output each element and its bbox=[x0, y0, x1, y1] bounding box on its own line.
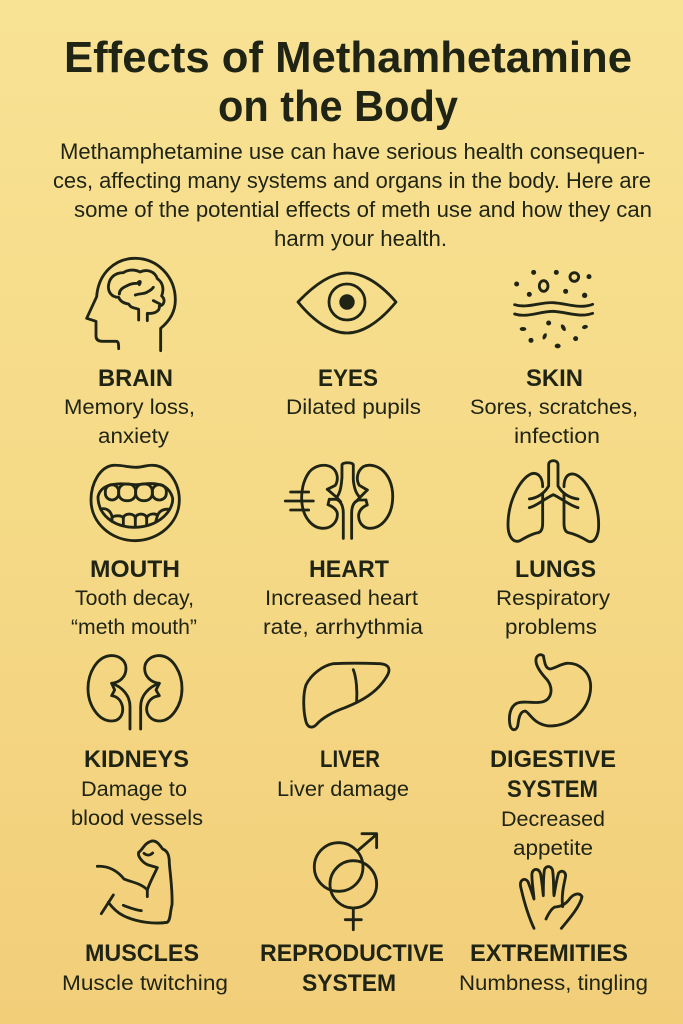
intro paragraph bbox=[53, 139, 652, 251]
heading: LUNGS bbox=[515, 556, 596, 583]
description: Dilated pupils bbox=[286, 395, 421, 419]
title: Effects of Methamhetamine bbox=[64, 33, 632, 82]
description: problems bbox=[505, 615, 597, 639]
heading: MUSCLES bbox=[85, 940, 199, 967]
panel: kidneys bbox=[71, 656, 203, 830]
icon: hand bbox=[520, 867, 582, 928]
description: Tooth decay, bbox=[75, 586, 194, 610]
description bbox=[470, 395, 638, 448]
icon: kidneys with vessels bbox=[285, 463, 393, 538]
icon: eye bbox=[298, 273, 396, 333]
description: rate, arrhythmia bbox=[263, 615, 423, 639]
description bbox=[263, 586, 423, 639]
heading: REPRODUCTIVE bbox=[260, 940, 444, 967]
panel: skin bbox=[470, 270, 638, 448]
description: blood vessels bbox=[71, 806, 203, 830]
description: Damage to bbox=[81, 777, 187, 801]
icon: gender symbols bbox=[314, 834, 377, 930]
panel: liver bbox=[277, 663, 409, 801]
panel: extremities bbox=[459, 867, 648, 995]
heading: EXTREMITIES bbox=[470, 940, 628, 967]
description bbox=[496, 586, 610, 639]
description: infection bbox=[514, 424, 600, 448]
icon: lungs bbox=[508, 461, 599, 542]
description: “meth mouth” bbox=[71, 615, 197, 639]
intro paragraph: some of the potential effects of meth use and how they can bbox=[74, 197, 652, 222]
description: anxiety bbox=[98, 424, 169, 448]
heading: EYES bbox=[318, 365, 378, 392]
heading: KIDNEYS bbox=[84, 746, 189, 773]
panel: muscles bbox=[62, 841, 228, 995]
description: Muscle twitching bbox=[62, 971, 228, 995]
heading: BRAIN bbox=[98, 365, 173, 392]
description bbox=[71, 586, 197, 639]
description bbox=[71, 777, 203, 830]
panel: heart bbox=[263, 463, 423, 639]
panel: mouth bbox=[71, 465, 197, 639]
title bbox=[64, 33, 632, 131]
panel: digestive system bbox=[490, 655, 616, 860]
heading bbox=[260, 940, 444, 997]
heading: DIGESTIVE bbox=[490, 746, 616, 773]
intro paragraph: Methamphetamine use can have serious health consequen- bbox=[60, 139, 645, 164]
description: Memory loss, bbox=[64, 395, 195, 419]
icon: open mouth with teeth bbox=[91, 465, 179, 541]
description: Sores, scratches, bbox=[470, 395, 638, 419]
description bbox=[501, 807, 605, 860]
description: appetite bbox=[513, 836, 593, 860]
description bbox=[64, 395, 195, 448]
description: Numbness, tingling bbox=[459, 971, 648, 995]
icon: head with brain bbox=[87, 258, 175, 351]
description: Increased heart bbox=[265, 586, 418, 610]
panel: reproductive system bbox=[260, 834, 444, 997]
heading: SYSTEM bbox=[302, 970, 396, 997]
intro paragraph: harm your health. bbox=[274, 226, 447, 251]
icon: flexed arm bbox=[97, 841, 172, 923]
icon: skin layers bbox=[514, 270, 593, 348]
panel: lungs bbox=[496, 461, 610, 639]
description: Decreased bbox=[501, 807, 605, 831]
heading: MOUTH bbox=[90, 556, 180, 583]
description: Liver damage bbox=[277, 777, 409, 801]
heading: SKIN bbox=[526, 365, 583, 392]
heading: SYSTEM bbox=[507, 776, 598, 803]
intro paragraph: ces, affecting many systems and organs in the body. Here are bbox=[53, 168, 651, 193]
heading: LIVER bbox=[320, 746, 380, 773]
panel: brain bbox=[64, 258, 195, 448]
heading bbox=[490, 746, 616, 803]
icon: kidneys bbox=[88, 656, 182, 729]
title: on the Body bbox=[218, 82, 458, 131]
description: Respiratory bbox=[496, 586, 610, 610]
panel: eyes bbox=[286, 273, 421, 419]
icon: stomach bbox=[509, 655, 591, 730]
heading: HEART bbox=[309, 556, 389, 583]
icon: liver bbox=[304, 663, 389, 727]
